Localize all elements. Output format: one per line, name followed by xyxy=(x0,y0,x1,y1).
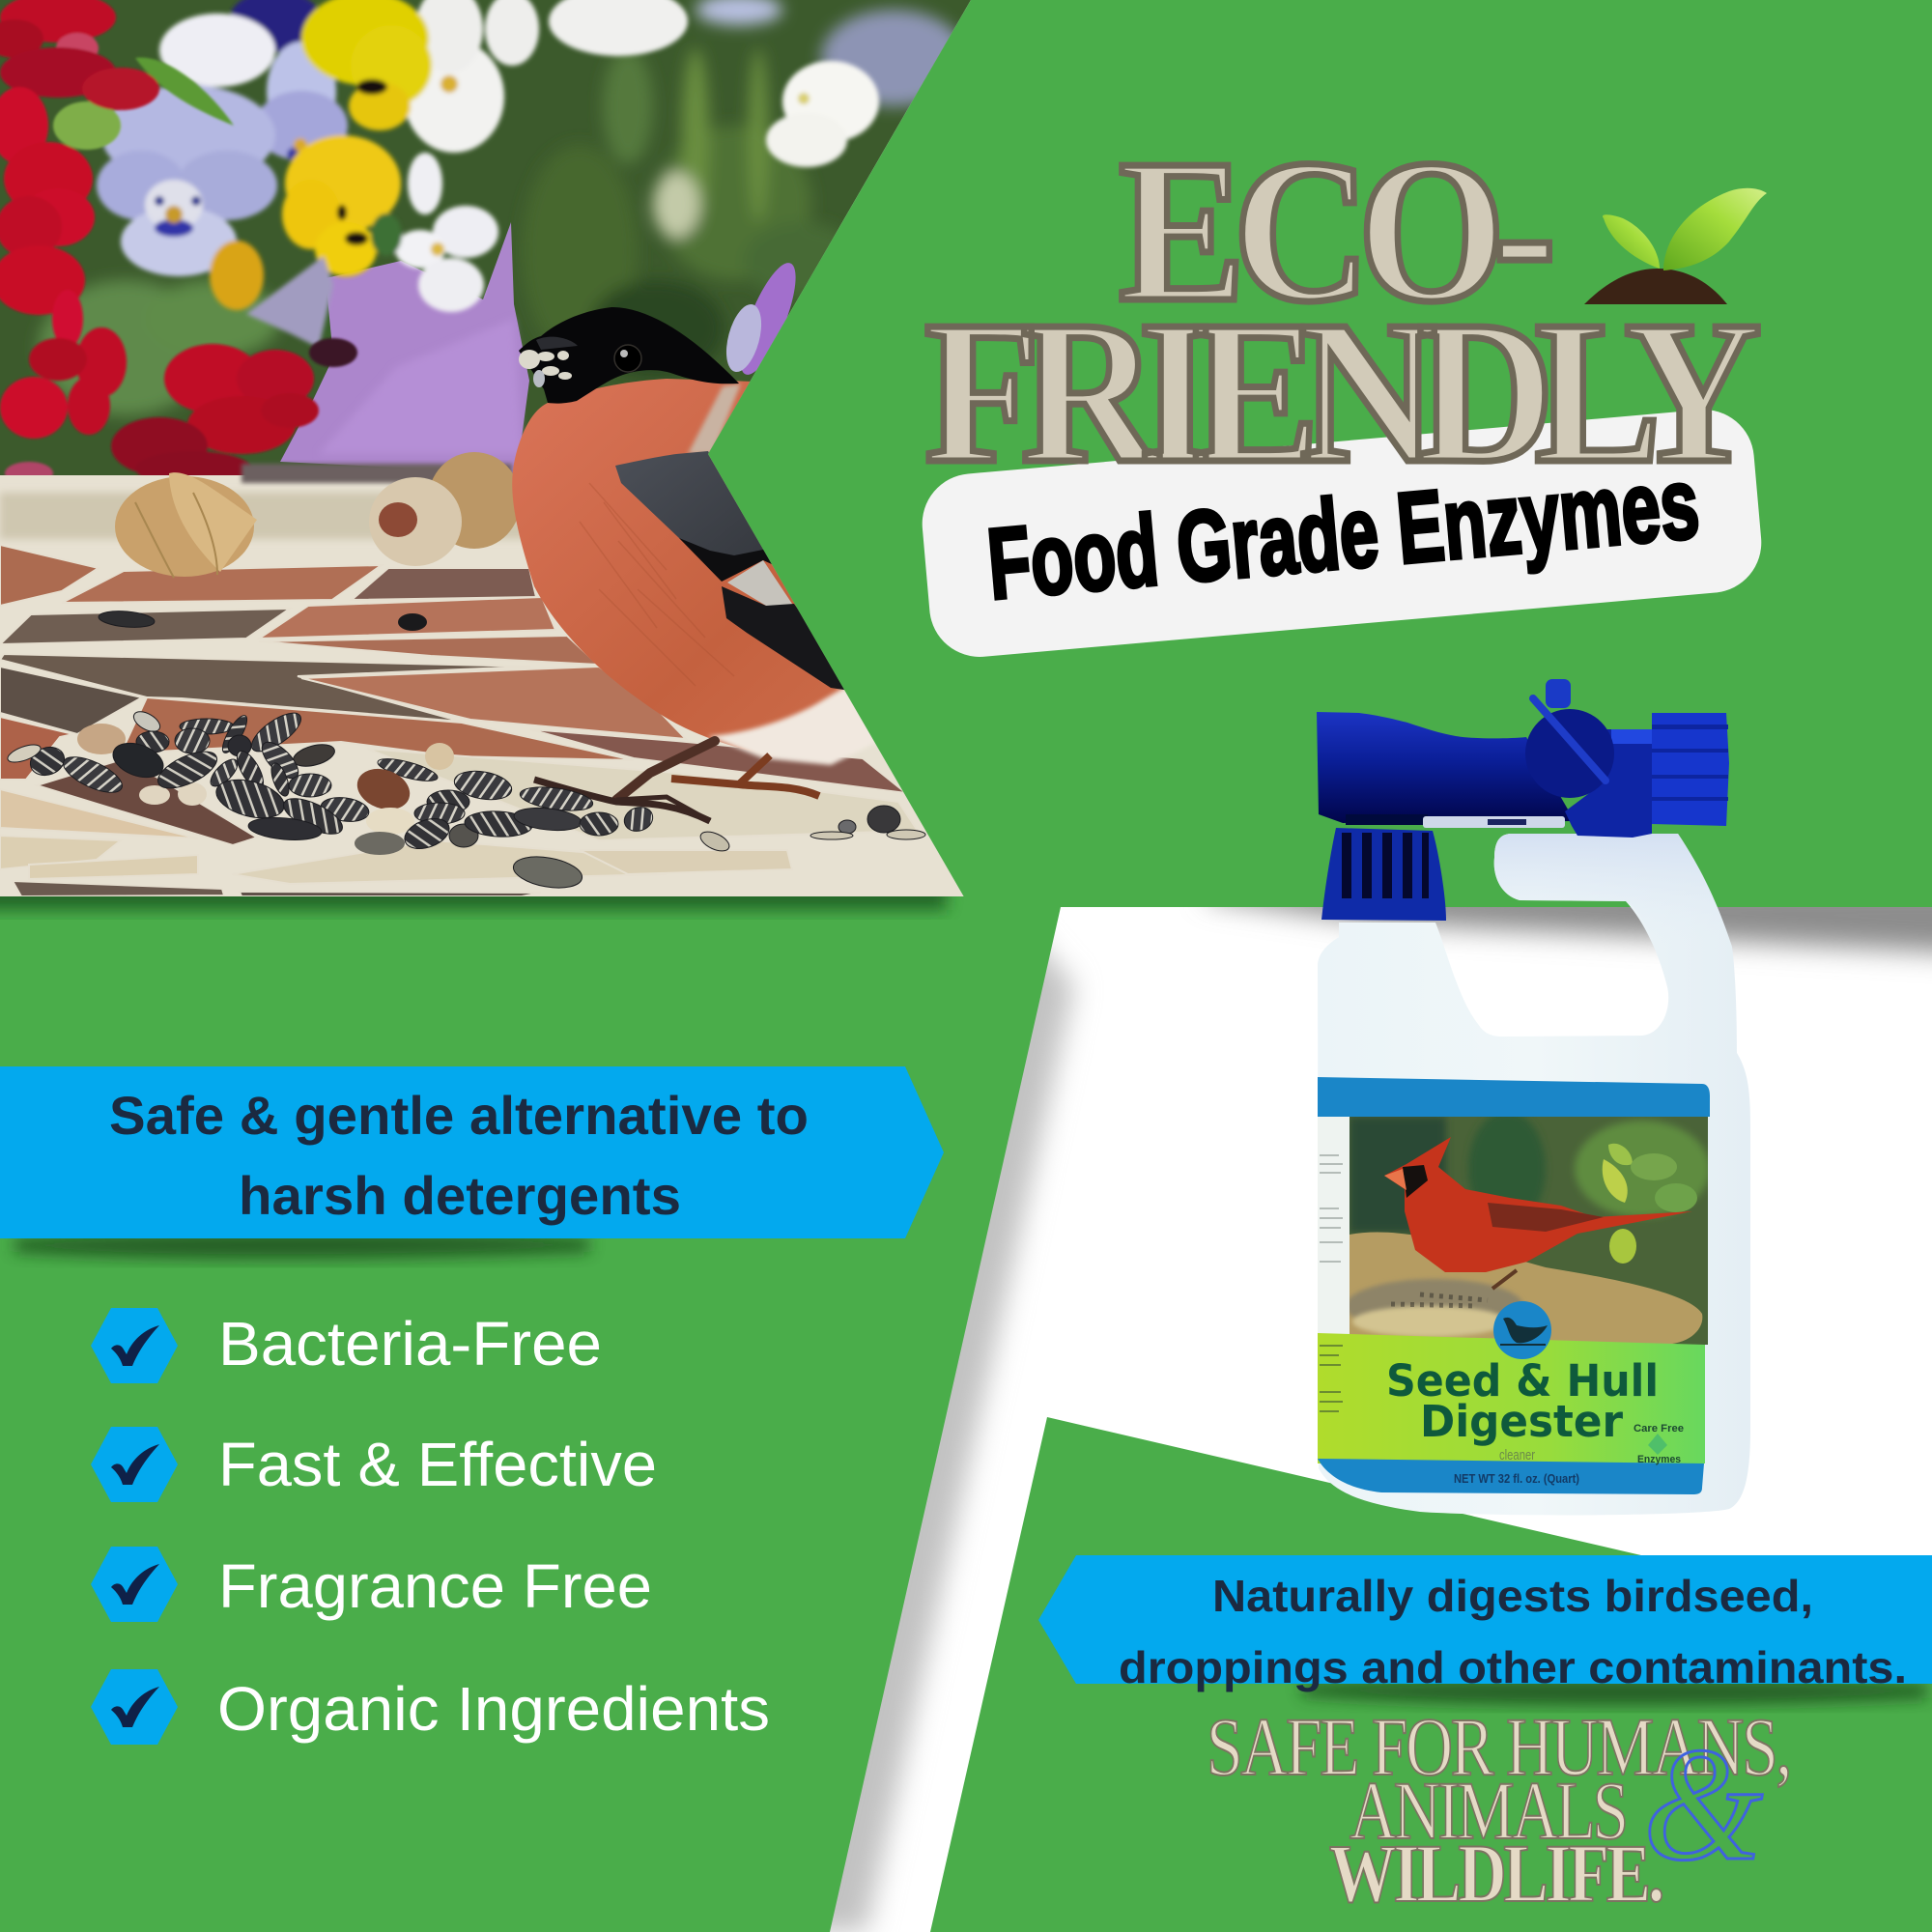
neck fringe xyxy=(688,384,741,454)
banner: safe and gentle xyxy=(0,1066,944,1260)
tagline: safe for humans, animals & wildlife xyxy=(1207,1700,1790,1919)
lavender pansy small xyxy=(263,38,341,104)
list item: Organic Ingredients: Organic Ingredients xyxy=(217,1674,770,1744)
dial xyxy=(1525,709,1614,798)
wing xyxy=(615,451,769,558)
list item: Bacteria-Free xyxy=(91,1308,602,1383)
patio xyxy=(0,475,976,896)
icon: sprout xyxy=(1584,188,1767,304)
brand mark xyxy=(1634,1423,1684,1465)
banner: naturally digests: Naturally digests birdseed, xyxy=(1212,1571,1813,1621)
banner shadow xyxy=(14,1231,589,1260)
pot xyxy=(280,222,529,473)
tagline: safe for humans, animals & wildlife: SAFE FOR HUMANS, xyxy=(1207,1700,1790,1793)
product name: Seed & Hull xyxy=(1386,1355,1659,1406)
title: Eco-Friendly: FRIENDLY xyxy=(924,278,1759,505)
bird legs xyxy=(616,741,715,800)
connector xyxy=(1565,729,1652,838)
yellow pansies xyxy=(301,0,429,85)
shadow under top green panel xyxy=(1208,884,1932,956)
lavender pansy big xyxy=(101,85,275,185)
bottle: Seed & Hull Digester xyxy=(1317,679,1750,1515)
list item: Bacteria-Free: Bacteria-Free xyxy=(218,1309,602,1378)
grey lilac pansy xyxy=(246,256,333,348)
white pill xyxy=(918,406,1766,661)
sprayer collar xyxy=(1321,828,1446,921)
banner: naturally digests: droppings and other contaminants. xyxy=(1119,1642,1907,1692)
sprayer head xyxy=(1317,712,1575,823)
net weight: NET WT 32 fl. oz. (Quart) xyxy=(1454,1471,1579,1486)
badge: bird circle xyxy=(1493,1301,1551,1359)
banner: safe and gentle: Safe & gentle alternative to xyxy=(109,1085,809,1146)
beak crumbs xyxy=(519,350,572,387)
bird xyxy=(512,307,874,825)
bottom blue band xyxy=(1318,1459,1704,1494)
panel: bottom right green xyxy=(930,1417,1932,1932)
title: Eco-Friendly: ECO- xyxy=(1119,117,1549,344)
panel: top right green xyxy=(708,0,1932,907)
nuts xyxy=(115,452,521,578)
tagline: safe for humans, animals & wildlife: WILDLIFE. xyxy=(1329,1827,1662,1919)
product name: Digester xyxy=(1420,1396,1624,1447)
title: Eco-Friendly xyxy=(918,117,1766,661)
panel: bottom left green xyxy=(0,869,1061,1932)
descriptor text: cleaner xyxy=(1499,1447,1535,1463)
product name xyxy=(1386,1355,1659,1447)
photo: bullfinch on patio xyxy=(0,0,976,896)
list item: Fast & Effective: Fast & Effective xyxy=(218,1430,657,1499)
flowers soft focus xyxy=(97,0,879,348)
label photo: cardinal xyxy=(1346,1111,1710,1345)
brand mark: Enzymes xyxy=(1637,1454,1681,1465)
sunflower seeds xyxy=(6,610,925,893)
banner: safe and gentle: harsh detergents xyxy=(239,1165,681,1226)
tagline: safe for humans, animals & wildlife: ANIMALS xyxy=(1350,1764,1626,1857)
red verbena xyxy=(0,0,357,520)
white pansies xyxy=(549,0,688,56)
bird body xyxy=(512,379,867,752)
tagline: safe for humans, animals & wildlife: & xyxy=(1643,1715,1763,1894)
banner shadow xyxy=(1301,1679,1927,1705)
cardinal bird xyxy=(1384,1137,1692,1272)
purple petals right xyxy=(742,263,796,375)
label xyxy=(1318,1077,1710,1117)
belly white xyxy=(707,689,874,768)
banner: naturally digests xyxy=(1038,1555,1932,1705)
shadow along white stripe xyxy=(792,927,1074,1932)
list item: Fragrance Free: Fragrance Free xyxy=(218,1551,652,1621)
green name band xyxy=(1318,1333,1705,1463)
shadow below photo xyxy=(0,896,955,920)
nozzle cap xyxy=(1652,713,1729,826)
handle tint xyxy=(1494,834,1732,947)
bottle body xyxy=(1318,834,1750,1515)
bird head xyxy=(519,307,739,404)
brand mark: Care Free xyxy=(1634,1423,1684,1435)
white pansy lower xyxy=(408,153,442,214)
